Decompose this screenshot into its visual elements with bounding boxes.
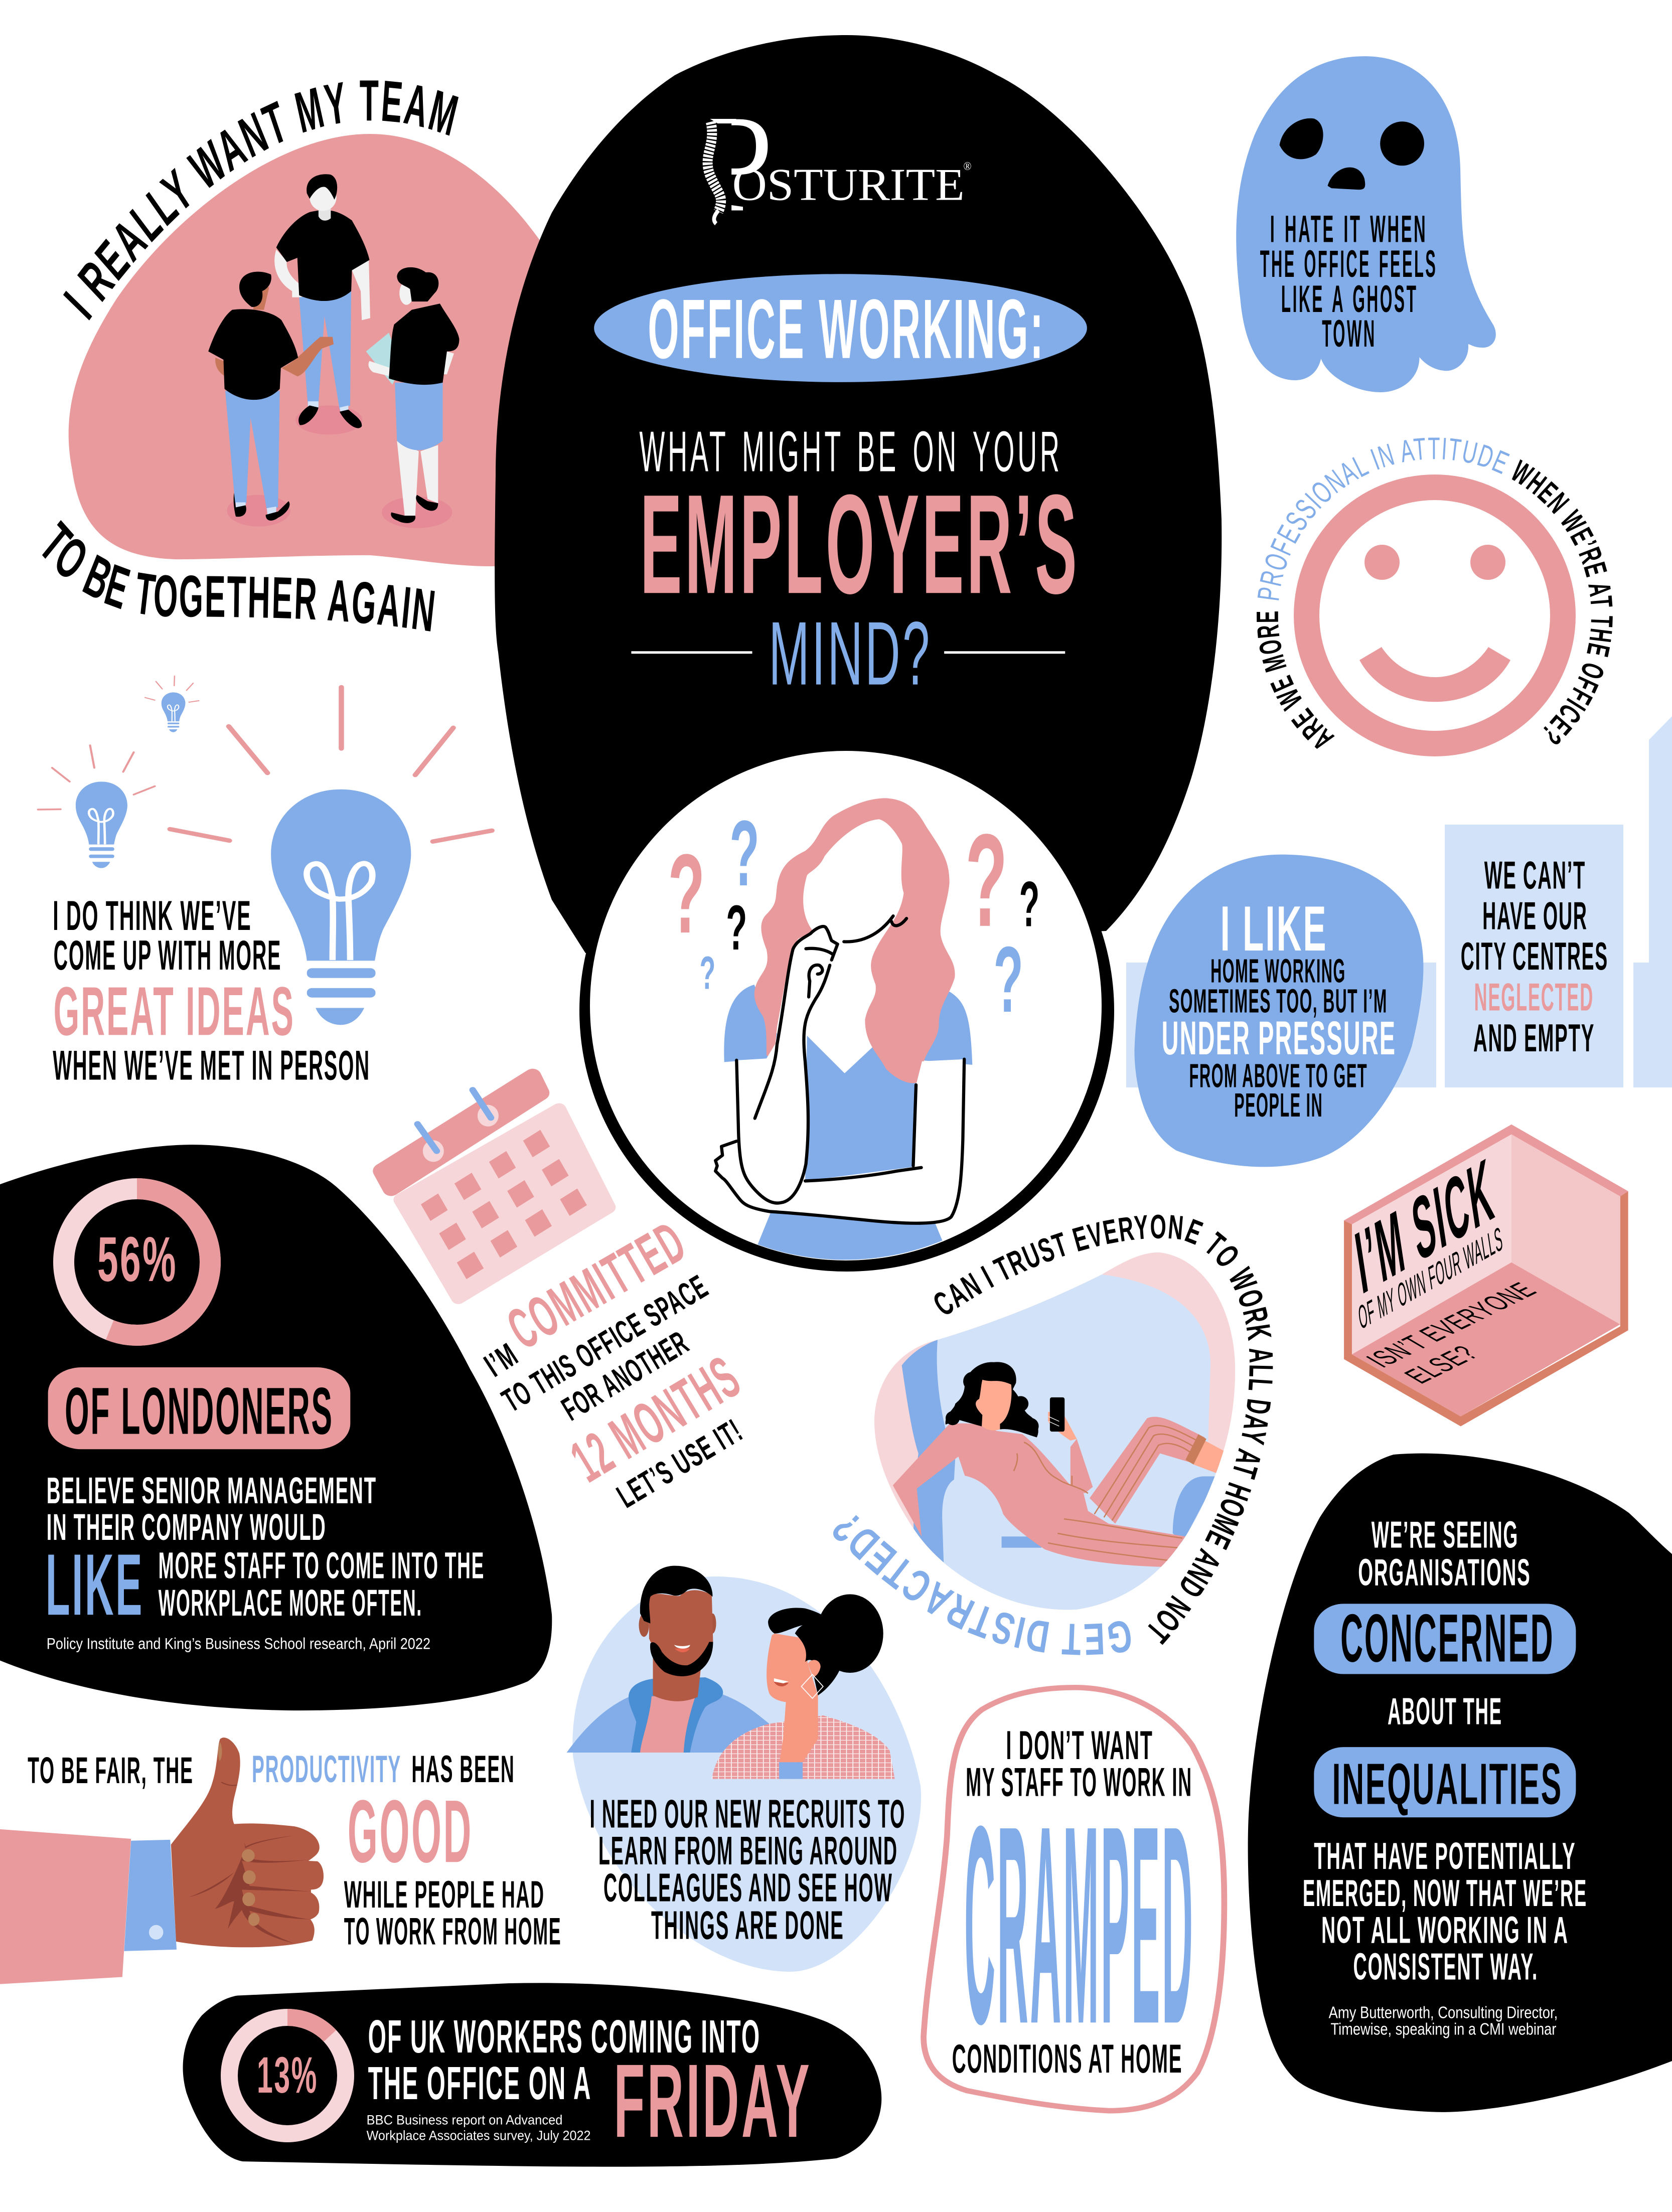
- text: city centres: [1461, 853, 1608, 1060]
- text: UK workers: THE OFFICE ON A: [368, 2057, 592, 2109]
- donut chart: 13%: [229, 2017, 346, 2134]
- source note: Timewise, speaking in a CMI webinar: [1331, 2020, 1556, 2038]
- logo: Posturite: OSTURITE: [732, 160, 965, 210]
- pill: inequalities: [1314, 1747, 1576, 1817]
- source note: [367, 2112, 591, 2143]
- room cube: [1344, 1125, 1628, 1427]
- text: GOOD: [348, 1781, 473, 1881]
- text: I'm sick: [1350, 1140, 1544, 1388]
- text: cramped conditions: I DON’T WANT: [1006, 1723, 1153, 1768]
- text: UK workers: [368, 2010, 812, 2159]
- illustration: two colleagues: [567, 1566, 895, 1779]
- headline: mind: [631, 602, 1065, 704]
- text: I like home working: HOME WORKING: [1210, 952, 1346, 990]
- source note: [1329, 2004, 1558, 2038]
- source note: Policy Institute and King’s Business School research, April 2022: [47, 1635, 430, 1653]
- ghost body: [1236, 56, 1496, 392]
- text: city centres: WE CAN’T: [1484, 853, 1586, 897]
- panel: inequalities: ABOUT THE: [1388, 1690, 1502, 1732]
- text: productivity good: PRODUCTIVITY: [252, 1748, 401, 1791]
- text: COLLEAGUES AND SEE HOW: [603, 1865, 893, 1910]
- curved text: can I trust everyone: CAN I TRUST EVERYONE TO WORK ALL DAY AT HOME AND NOT: [927, 1208, 1280, 1650]
- text: I like home working: PEOPLE IN: [1234, 1086, 1323, 1124]
- panel: thumbs up: TO BE FAIR, THE: [28, 1749, 194, 1791]
- pill: concerned: [1314, 1600, 1576, 1676]
- source note: Workplace Associates survey, July 2022: [367, 2128, 591, 2143]
- ghost text: TOWN: [1322, 311, 1377, 355]
- title block: [594, 86, 1087, 704]
- question marks: ?: [668, 831, 705, 957]
- panel: ghost: [1236, 56, 1496, 392]
- text: I like home working: SOMETIMES TOO, BUT I’M: [1169, 982, 1388, 1020]
- text: great ideas: GREAT IDEAS: [54, 973, 295, 1050]
- black blob: [1248, 1453, 1672, 2112]
- text: great ideas: I DO THINK WE’VE: [53, 892, 252, 939]
- text: I like home working: [1162, 893, 1396, 1124]
- text: great ideas: COME UP WITH MORE: [54, 932, 281, 979]
- circular text: professional in attitude: PROFESSIONAL IN ATTITUDE: [1251, 431, 1514, 603]
- panel: light bulbs: [38, 676, 492, 1088]
- main black blob: [495, 35, 1222, 953]
- donut chart: 56%: 56%: [97, 1224, 178, 1295]
- question marks: ?: [700, 946, 715, 999]
- text: TO WORK FROM HOME: [344, 1910, 561, 1953]
- text: believe senior management: IN THEIR COMPANY WOULD: [47, 1506, 326, 1548]
- text: HAS BEEN: [411, 1748, 515, 1791]
- donut chart: 13%: 13%: [257, 2046, 318, 2104]
- rotated text: committed: 12 MONTHS: [560, 1343, 751, 1495]
- question marks: ?: [1019, 869, 1039, 940]
- source note: Amy Butterworth, Consulting Director,: [1329, 2004, 1558, 2022]
- illustration: three colleagues: [208, 174, 459, 528]
- ghost text: I HATE IT WHEN: [1270, 207, 1427, 250]
- donut chart: 56%: [64, 1189, 210, 1335]
- rotated text: committed: FOR ANOTHER: [555, 1323, 695, 1428]
- logo: Posturite: P: [705, 86, 773, 241]
- ghost text: [1260, 207, 1437, 355]
- rotated text: committed: I’M: [478, 1335, 524, 1384]
- text: LEARN FROM BEING AROUND: [598, 1829, 898, 1873]
- text: OF UK WORKERS COMING INTO: [368, 2010, 761, 2063]
- headline: mind: MIND?: [769, 602, 932, 704]
- text: I NEED OUR NEW RECRUITS TO: [590, 1792, 905, 1836]
- smiley face: [1294, 475, 1576, 756]
- city skyline blocks: [1126, 716, 1672, 1087]
- pill: of londoners: [48, 1367, 350, 1449]
- circular text: are we more: ARE WE MORE: [1251, 610, 1340, 757]
- text: productivity good: [252, 1748, 561, 1953]
- blue blob: [1134, 855, 1423, 1167]
- text: new recruits: [590, 1792, 905, 1948]
- question marks: [668, 802, 1039, 1032]
- panel: 13% Friday: [183, 1983, 881, 2167]
- text: potentially emerged: [1303, 1835, 1587, 1988]
- question marks: ?: [726, 892, 747, 963]
- question marks: ?: [729, 802, 759, 905]
- text: organisations: [1358, 1514, 1531, 1594]
- light blue blob: [572, 1576, 921, 1972]
- panel: cramped: [924, 1687, 1224, 2111]
- text: MY STAFF TO WORK IN: [966, 1760, 1192, 1805]
- icon: medium bulb: [38, 745, 155, 868]
- circular text: when we're at the office: WHEN WE’RE AT THE OFFICE?: [1505, 454, 1619, 752]
- illustration: woman thinking: [668, 798, 1039, 1266]
- curved text: get distracted: GET DISTRACTED?: [821, 1502, 1135, 1665]
- ghost face: [1280, 118, 1424, 190]
- panel: calendar: [381, 1076, 609, 1298]
- text: I like home working: I LIKE: [1221, 893, 1328, 964]
- outline blob: [924, 1687, 1224, 2111]
- illustration: woman on sofa: [874, 1252, 1235, 1610]
- text: EMPLOYER’S: [640, 465, 1080, 623]
- text: believe senior management: [46, 1470, 485, 1633]
- logo: Posturite: ®: [963, 160, 972, 173]
- curved heading: I really want my team: I REALLY WANT MY TEAM: [63, 80, 459, 321]
- subtitle: WHAT MIGHT BE ON YOUR: [639, 419, 1062, 484]
- panel: inequalities: [1248, 1453, 1672, 2112]
- text: believe senior management: BELIEVE SENIOR MANAGEMENT: [47, 1470, 377, 1512]
- panel: 56% of Londoners: [0, 1145, 552, 1710]
- question marks: ?: [965, 807, 1007, 954]
- team blob: [69, 134, 542, 566]
- panel: thinking woman circle: [579, 750, 1114, 1272]
- question marks: ?: [993, 927, 1023, 1032]
- text: cramped conditions: [952, 1723, 1195, 2082]
- panel: new recruits: [567, 1566, 921, 1972]
- text: I'm sick: ELSE?: [1397, 1341, 1486, 1388]
- illustration: thumbs up hand: [0, 1737, 324, 1984]
- text: I like home working: FROM ABOVE TO GET: [1189, 1057, 1367, 1094]
- panel: thumbs up: [0, 1737, 324, 1984]
- curved caption: to be together again: TO BE TOGETHER AGAIN: [29, 511, 439, 645]
- text: THINGS ARE DONE: [651, 1903, 844, 1948]
- panel: light bulbs: WHEN WE’VE MET IN PERSON: [53, 1042, 370, 1088]
- panel: cramped: CONDITIONS AT HOME: [952, 2036, 1182, 2081]
- text: believe senior management: LIKE: [46, 1536, 144, 1633]
- heading pill: office working: [594, 274, 1087, 382]
- black blob: [183, 1983, 881, 2167]
- text: I like home working: UNDER PRESSURE: [1162, 1012, 1396, 1065]
- heading pill: office working: OFFICE WORKING:: [648, 282, 1045, 376]
- panel: team together: [54, 68, 542, 566]
- panel: home working sofa: [833, 1215, 1273, 1655]
- panel: 56% of Londoners: MORE STAFF TO COME INTO THE: [159, 1545, 485, 1587]
- logo: Posturite: [701, 86, 972, 241]
- text: believe senior management: WORKPLACE MORE OFTEN.: [159, 1582, 422, 1624]
- rotated text: committed: LET’S USE IT!: [611, 1411, 749, 1515]
- panel: 56% of Londoners: OF LONDONERS: [65, 1374, 334, 1448]
- rotated text: committed: TO THIS OFFICE SPACE: [496, 1268, 714, 1419]
- rotated text: committed: COMMITTED: [497, 1209, 697, 1362]
- ghost text: THE OFFICE FEELS: [1260, 242, 1437, 285]
- ghost text: LIKE A GHOST: [1281, 277, 1418, 321]
- rotated text: committed: [478, 1209, 751, 1515]
- black blob: [0, 1145, 552, 1710]
- icon: small bulb: [145, 676, 199, 732]
- icon: large bulb: [170, 687, 492, 1025]
- icon: calendar: [381, 1076, 609, 1298]
- panel: under pressure: [1134, 853, 1628, 1427]
- text: I'm sick: ISN’T EVERYONE: [1358, 1278, 1544, 1372]
- text: great ideas: [53, 892, 370, 1088]
- source note: BBC Business report on Advanced: [367, 2112, 562, 2127]
- text: FRIDAY: [614, 2042, 812, 2159]
- panel: smiley: [1251, 431, 1619, 757]
- text: WHILE PEOPLE HAD: [344, 1873, 545, 1916]
